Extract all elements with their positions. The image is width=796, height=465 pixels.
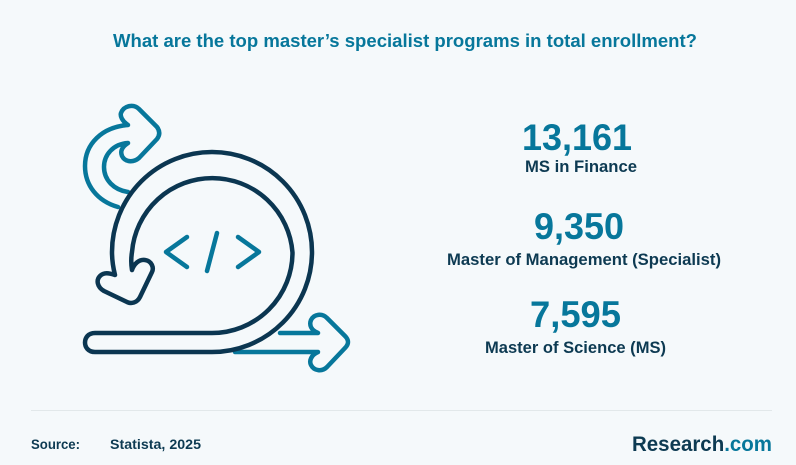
logo: Research.com — [632, 433, 772, 456]
stat: Master of Management — [447, 206, 721, 269]
stat: Master of Science: 7,595 — [530, 294, 621, 335]
stat: MS in Finance — [522, 117, 637, 176]
icon: dark spiral arrow — [85, 152, 312, 352]
icon: teal curved arrow — [85, 106, 159, 207]
source label: Source: — [31, 436, 80, 452]
icon: teal right arrow — [235, 315, 348, 370]
stat: Master of Science — [485, 294, 666, 357]
stat: Master of Science: Master of Science (MS) — [485, 338, 666, 357]
icon: agile sprint loop with code symbol — [85, 106, 348, 370]
stat: MS in Finance: 13,161 — [522, 117, 632, 158]
icon: slash code mark — [207, 233, 217, 271]
stat: Master of Management: 9,350 — [534, 206, 624, 247]
source text: Statista, 2025 — [110, 436, 201, 452]
icon: greater-than code bracket — [238, 237, 259, 267]
stat: Master of Management: Master of Management (Specialist) — [447, 250, 721, 269]
stat: MS in Finance: MS in Finance — [525, 157, 637, 176]
title: What are the top master’s specialist programs in total enrollment? — [113, 31, 697, 51]
icon: less-than code bracket — [166, 237, 187, 267]
